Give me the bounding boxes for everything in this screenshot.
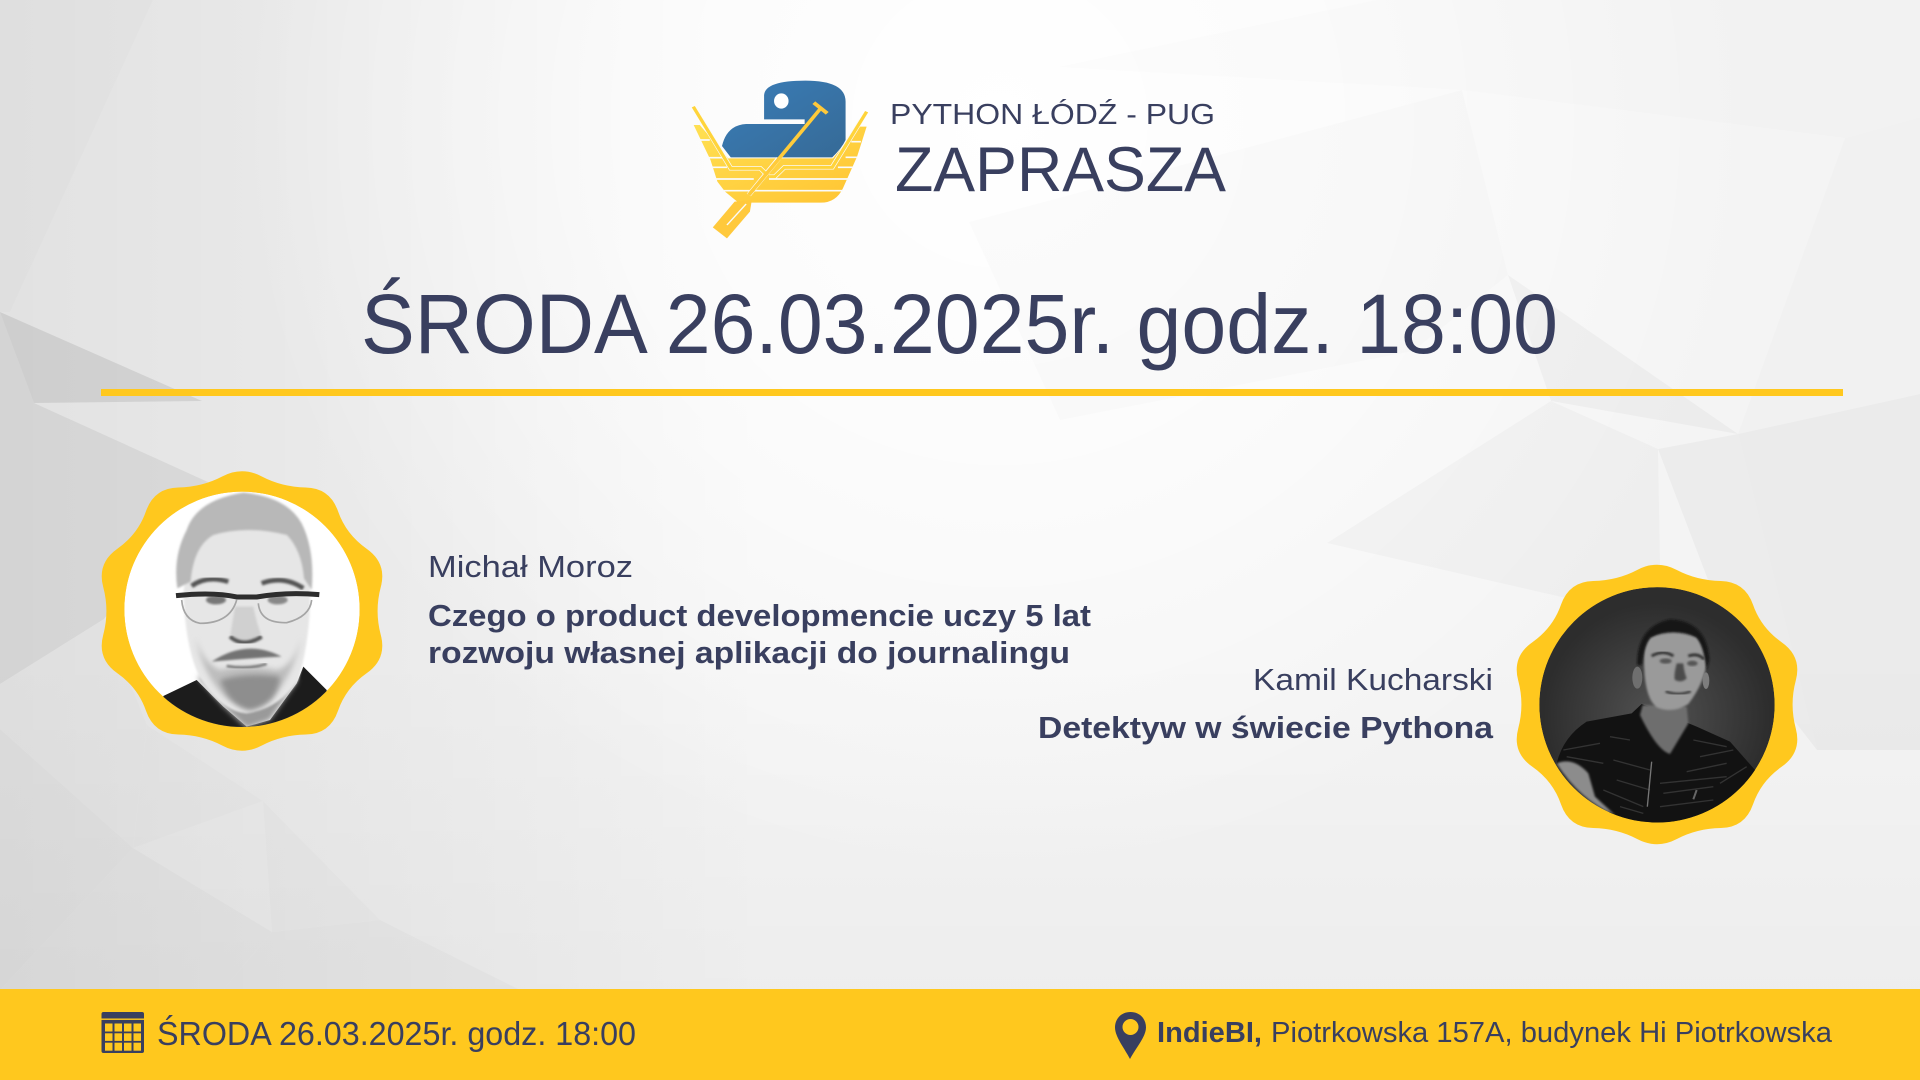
title: event date and time: ŚRODA 26.03.2025r. godz. 18:00: [361, 277, 1558, 371]
footer venue: IndieBI,: [1157, 1017, 1262, 1049]
talk title: Kamil Kucharski: Detektyw w świecie Pythona: [1038, 710, 1494, 745]
footer date: ŚRODA 26.03.2025r. godz. 18:00: [157, 1014, 636, 1052]
icon: location pin: [1115, 1012, 1146, 1059]
heading: organiser name: PYTHON ŁÓDŹ - PUG: [890, 98, 1215, 131]
divider line under title: [101, 389, 1843, 396]
speaker badge: Michał Moroz portrait: [102, 471, 382, 751]
heading: invitation: ZAPRASZA: [895, 135, 1226, 205]
talk title: Michał Moroz: Czego o product developmencie uczy 5 lat: [428, 598, 1091, 633]
speaker name: Kamil Kucharski: Kamil Kucharski: [1253, 662, 1493, 697]
speaker name: Michał Moroz: Michał Moroz: [428, 549, 633, 584]
talk title: Michał Moroz: [428, 598, 1091, 670]
talk title: Michał Moroz: rozwoju własnej aplikacji do journalingu: [428, 635, 1070, 670]
icon: calendar: [102, 1012, 144, 1053]
footer bar: [0, 989, 1920, 1080]
logo: python snake boat with oar: [693, 81, 867, 238]
speaker badge: Kamil Kucharski portrait: [1517, 565, 1797, 844]
footer venue: Piotrkowska 157A, budynek Hi Piotrkowska: [1271, 1017, 1833, 1049]
